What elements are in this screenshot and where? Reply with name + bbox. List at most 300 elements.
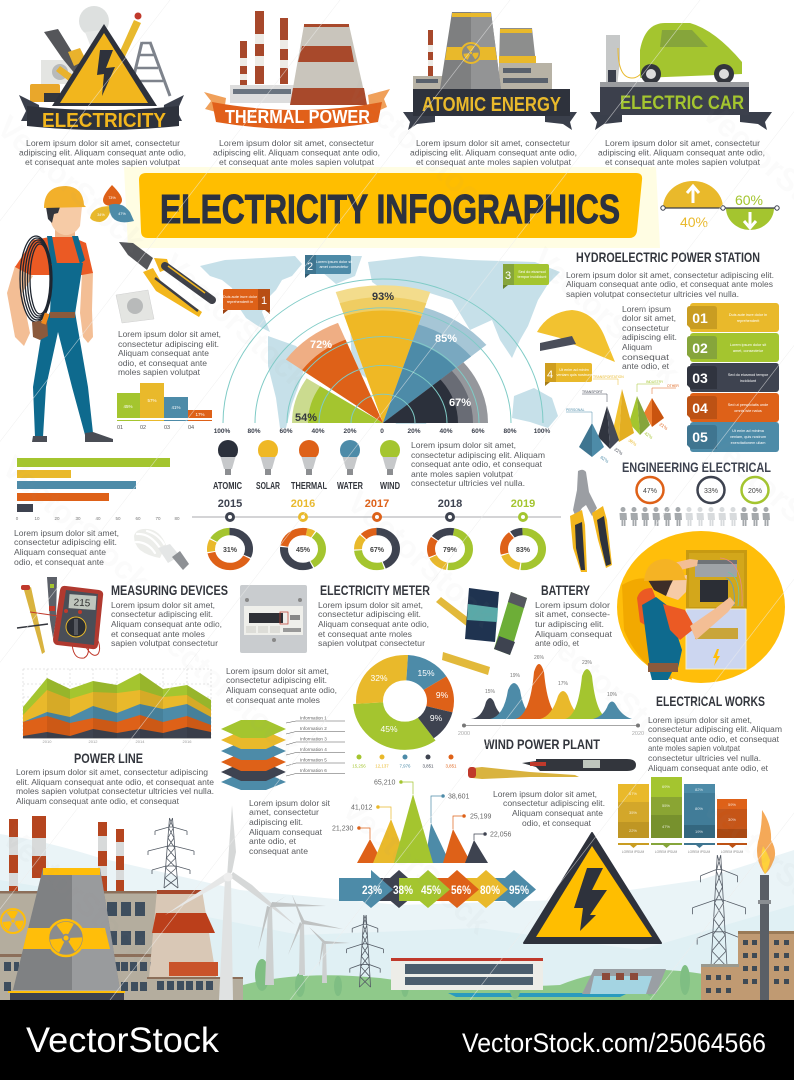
thermal tower [147,890,243,1000]
text block: electrical works: Lorem ipsum dolor sit amet, [648,715,752,725]
item 03 [687,363,779,392]
south america [268,336,308,428]
bell values: 19% [510,673,521,679]
caption: thermal power: adipiscing elit. Aliquam consequat ante odio, [213,148,380,158]
text block: turbine note: ante odio, et [249,836,297,846]
buildings [413,63,552,89]
item 04: Sed ut perspiciatis unde [728,403,768,407]
text block: wind plant: Aliquam consequat ante [512,808,603,818]
petal chart: 73% [108,196,116,200]
bulb labels: THERMAL [291,481,327,492]
callout flag 1: Duis aute irure dolor [223,295,258,299]
arrow 95% [486,870,536,908]
callout flag 1: 1 [261,295,267,307]
column ticks [618,843,747,848]
donut 2017: 67% [370,547,385,554]
text block: measuring: consectetur adipiscing elit. [111,609,213,619]
panel: electricity emblem [19,6,184,132]
bulb: water [340,440,360,475]
donut legend: 7,976 [400,764,411,768]
bulb labels: ATOMIC [213,481,242,492]
timeline years: 2015 [218,498,242,510]
text block: worker: Aliquam consequat ante [118,348,209,358]
title: ELECTRICITY INFOGRAPHICS [160,186,620,232]
text block: helmet note: Lorem ipsum [622,304,671,314]
column values [629,784,736,834]
australia [512,388,558,428]
bulb labels [213,481,400,492]
layer labels: Information 4 [300,747,327,752]
lower panel with bolt [686,609,746,669]
pyramid: orange [644,398,664,427]
donut 2015: 31% [223,547,238,554]
item 02: amet, consectetur [733,349,764,353]
item 05: 05 [692,429,708,445]
ring 20%: 20% [748,488,762,495]
bar chart: horizontal: 70 [155,516,161,521]
ribbon: electric car: ELECTRIC CAR [620,93,744,114]
text block: electrical works: consectetur adipiscing elit. Aliquam [648,724,782,734]
fuse cabinet [686,550,747,609]
icon: cfl bulb [134,529,189,570]
heading: wind power plant: WIND POWER PLANT [484,736,600,752]
text block: power line: Aliquam consequat ante odio, et consequat [16,796,180,806]
turbine: second [258,896,326,985]
pylon: right [693,855,745,967]
heading: electricity meter: ELECTRICITY METER [320,582,430,598]
caption: electricity [19,138,186,167]
timeline nodes [226,514,526,520]
petal chart: 47% [118,212,126,216]
caption: electric car: Lorem ipsum dolor sit amet, consectetur [605,138,760,148]
arrow values: 95% [509,883,529,897]
bulb: wind [380,440,400,475]
power station [391,958,543,990]
bar chart: horizontal: 50 [115,516,121,521]
bar chart: small columns: 02 [140,425,146,431]
item 02: 02 [692,340,708,356]
peak labels: 25,199 [470,814,492,820]
item 04: omnis iste natus [734,409,762,413]
area chart [23,669,211,744]
sector values: 85% [435,333,457,345]
chimneys: left [9,816,124,891]
pyramid labels: PERSONAL [566,408,585,412]
factory buildings [0,891,170,1000]
text block: wind plant [493,789,605,828]
text block: meter: sapien volutpat consectetur [318,638,425,648]
column values: 67% [629,791,637,796]
building [230,85,294,103]
text block: wind plant: consectetur adipiscing elit. [503,798,605,808]
bulb labels: WATER [337,481,364,492]
pylon: left [148,818,194,888]
icon: pencil [116,12,142,63]
donut legend: 3,851 [446,764,457,768]
axis labels: 2010 [43,739,52,744]
bell chart [458,655,644,737]
electrician scene [617,531,785,683]
text block: power line: Lorem ipsum dolor sit amet, consectetur adipiscing [16,767,208,777]
car [640,23,742,84]
pyramid labels: TRANSPORTATION [593,375,624,379]
item 04: 04 [692,400,708,416]
item 01: reprehenderit [737,319,760,323]
peaks [357,794,488,863]
bell values [485,655,618,698]
text block: meter: Aliquam consequat ante odio, [318,619,429,629]
ribbon: atomic energy [403,89,577,130]
column: green [651,777,682,838]
text block: power line [16,767,214,806]
turbine: third [288,895,343,975]
donut chart: large [352,666,457,768]
scale labels: 100% [534,428,551,435]
column labels: LOREM IPSUM [721,850,743,854]
text block: turbine note: adipiscing elit. [249,817,303,827]
charger [606,35,647,87]
pyramid chart [566,375,679,464]
pyramid labels [566,375,679,412]
text block: battery: ante odio, et [535,638,580,648]
text block: worker: Lorem ipsum dolor sit amet, [118,329,221,339]
scale labels [214,428,551,435]
ribbon: electricity [19,95,184,132]
arrow 38% [371,870,421,908]
chimney [428,30,433,76]
sector values: 54% [295,412,317,424]
layer: yellow [23,690,211,738]
overalls [33,236,93,437]
greenland [320,256,362,284]
text block: electrical works: consectetur ultricies vel nulla. [648,753,761,763]
bell values: 15% [485,689,496,695]
pyramid percentages [599,422,669,464]
text block: measuring: et consequat ante moles [111,629,205,639]
peak labels: 21,230 [332,826,354,832]
bar chart: horizontal: 80 [174,516,180,521]
text block: helmet note [622,304,677,371]
landscape [0,805,794,1000]
timeline years: 2016 [291,498,315,510]
ring gauges [636,477,768,503]
scale labels: 20% [343,428,357,435]
icon: pliers [44,29,88,85]
layer labels: Information 3 [300,736,327,742]
text block: chart note [411,440,545,488]
item 02 [687,333,779,362]
chimneys [240,11,288,86]
arrow values: 80% [480,883,500,897]
text block: measuring [111,600,222,648]
text block: electrical works: consequat ante odio, et consequat [648,734,780,744]
scale labels: 20% [407,428,421,435]
layered hexagon stack [221,716,345,790]
sector values [295,291,471,424]
callout flag 3: tempor incididunt [518,275,547,279]
bar chart: small columns: 57% [147,398,157,403]
text block: layers note [226,666,337,705]
text block: chart note: consectetur adipiscing elit. Aliquam [411,450,545,460]
text block: hydroelectric [566,270,774,299]
arms [7,266,93,346]
bar chart: small columns: 41% [171,405,181,410]
layer labels: Information 2 [300,726,327,731]
callout flag 4: 4 [547,369,553,381]
watermark text: VectorStock [145,613,307,764]
icon: warning triangle [52,24,157,106]
bar chart: small columns: 04 [188,425,194,431]
caption: atomic energy: Lorem ipsum dolor sit amet, consectetur [416,138,570,148]
scale labels: 40% [439,428,453,435]
arrow chain [339,870,536,908]
bell axis: 2020 [632,731,644,737]
layer: blue [23,704,211,738]
item 04 [687,393,779,422]
pyramid labels: INDUSTRY [646,380,664,384]
bell values: 17% [558,681,569,687]
heading: power line: POWER LINE [74,750,143,766]
heading: measuring devices: MEASURING DEVICES [111,582,228,598]
peak labels [332,780,512,840]
item 01: 01 [692,310,708,326]
text block: bar note [14,528,119,567]
ring 33%: 33% [704,488,718,495]
sector: wind 54% [292,378,383,423]
dam [582,969,666,994]
bar chart: horizontal: 60 [135,516,141,521]
text block: meter: Lorem ipsum dolor sit amet, [318,600,423,610]
donut 2018: 79% [443,547,458,554]
caption: electricity: et consequat ante moles sapien volutpat [25,157,181,167]
pyramid percentages: 42% [643,431,654,440]
warning sign [524,833,661,943]
worker illustration [7,186,113,442]
pyramid percentages: 22% [613,447,624,456]
callout flag 3: Sed do eiusmod [518,270,546,274]
layer leaders [286,721,345,776]
icon: toolbox [30,84,60,102]
layer: dark [23,727,211,738]
bar chart: horizontal: 10 [34,516,40,521]
column values: 69% [662,784,670,789]
text block: layers note: consectetur adipiscing elit. [226,675,327,685]
donut 2018 [431,532,469,566]
column values: 30% [728,817,736,822]
item 05: Ut enim ad minima [732,429,765,433]
caption: thermal power: et consequat ante moles sapien volutpat [219,157,375,167]
arrow values [362,883,529,897]
pyramid: yellow [613,389,634,442]
icon: multimeter and probes [17,577,103,658]
scale labels: 60% [471,428,485,435]
fold shading [47,673,211,738]
column labels: LOREM IPSUM [622,850,644,854]
second tower [499,28,536,64]
donut values: 32% [370,673,388,683]
axis labels [43,739,192,744]
turbine: large [165,805,295,1000]
watermark text: VectorStock [535,618,697,769]
text block: power line: moles sapien volutpat consectetur ultricies vel nulla. [16,786,214,796]
caption: electric car: adipiscing elit. Aliquam consequat ante odio, [598,148,765,158]
text block: chart note: consequat ante odio, et consequat [411,459,543,469]
column labels: LOREM IPSUM [688,850,710,854]
icon: large pliers [119,242,212,317]
text block: helmet note: Aliquam [622,342,652,352]
icon: voltage testers [468,759,636,779]
text block: layers note: et consequat ante moles [226,695,320,705]
text block: measuring: sapien volutpat consectetur [111,638,218,648]
pylon: middle [347,915,383,987]
text block: meter [318,600,429,648]
boots [32,432,113,442]
text block: battery: Aliquam consequat [535,629,613,639]
column: orange [717,799,747,838]
footer url: VectorStock.com/25064566 [462,1028,766,1058]
belt and pouch [32,312,75,340]
icon: combination pliers [570,470,612,572]
bulb legend [213,440,400,492]
title banner [124,167,660,248]
callout flag 2: 2 [307,261,313,273]
pyramid: dark [598,406,619,449]
donut legend: 15,256 [352,764,366,768]
timeline years: 2018 [438,498,462,510]
arrow 80% [457,870,508,908]
shirt [15,237,93,275]
eurasia [368,256,560,358]
scale labels: 100% [214,428,231,435]
callout flag 3: 3 [505,270,511,282]
arrow values: 56% [451,883,471,897]
text block: layers note: Aliquam consequat ante odio, [226,685,337,695]
scale labels: 0 [380,428,384,435]
bulb labels: WIND [380,481,400,492]
text block: meter: consectetur adipiscing elit. [318,609,421,619]
item 02: Lorem ipsum dolor sit [730,343,767,347]
text block: battery: sit amet, consecte- [535,609,610,619]
callout flag 1 [223,289,270,314]
callout flag 3 [503,264,549,289]
watermark text: VectorStock [335,790,497,941]
donut values: 9% [430,713,443,723]
scale labels: 80% [503,428,517,435]
text block: hydroelectric: sapien volutpat consectetur ultricies vel nulla. [566,289,739,299]
arrow 56% [428,870,479,908]
text block: bar note: odio, et consequat ante [14,557,104,567]
pyramid labels: TRANSPORT [582,390,603,394]
donut 2019: 83% [516,547,531,554]
watermark text: VectorStock [340,73,502,224]
donut values: 9% [436,690,449,700]
cable coil [20,236,52,322]
donut values: 15% [417,668,435,678]
arrow 45% [399,870,450,908]
axis labels: 2012 [89,739,98,744]
donut 2016 [284,532,322,566]
text block: chart note: consectetur ultricies vel nulla. [411,478,525,488]
bar chart: horizontal: 30 [75,516,81,521]
text block: turbine note: Aliquam consequat [249,827,323,837]
donut 2016: 45% [296,547,311,554]
layer labels [300,716,327,773]
radial percent chart [214,279,551,435]
item 03: 03 [692,370,708,386]
sector: water 85% [383,307,486,423]
text block: worker: odio, et consequat ante [118,358,207,368]
text block: worker: consectetur adipiscing elit. [118,339,219,349]
text block: wind plant: odio, et consequat [522,818,592,828]
column values: 82% [695,787,703,792]
donut 2017 [358,532,396,566]
bell values: 26% [534,655,545,661]
bar chart: small columns: 01 [117,425,123,431]
text block: helmet note: dolor sit amet, [622,313,676,323]
sector values: 72% [310,339,332,351]
flare stack [757,810,775,1000]
item 05 [687,422,779,452]
icon: ladder [129,42,170,96]
petal chart [90,185,134,222]
watermark text: VectorStock [155,246,317,397]
caption: thermal power: Lorem ipsum dolor sit amet, consectetur [219,138,374,148]
column: yellow [618,784,649,838]
icon: wall socket [41,60,77,84]
panel: electric car emblem [590,23,772,130]
peak labels: 22,056 [490,832,512,838]
text block: turbine note [249,798,331,856]
peak labels: 65,210 [374,780,396,786]
bar chart: horizontal: 0 [16,516,19,521]
caption: electric car [598,138,765,167]
donut 2015 [211,532,249,566]
nuclear cooling tower [8,868,125,1000]
text block: worker: moles sapien volutpat [118,367,201,377]
caption: electricity: Lorem ipsum dolor sit amet, consectetur [26,138,180,148]
people pictogram [620,507,770,526]
mountain chart [332,780,512,863]
layer labels: Information 5 [300,758,327,762]
callout flag 4: Ut enim ad minim [559,368,589,372]
scale labels: 40% [311,428,325,435]
text block: bar note: Aliquam consequat ante [14,547,106,557]
scale labels: 80% [247,428,261,435]
pyramid: blue [579,423,604,457]
text block: turbine note: amet, consectetur [249,807,319,817]
cooling tower [290,24,367,105]
bell values: 23% [582,660,593,666]
bulb: thermal [299,440,319,475]
text block: wind plant: Lorem ipsum dolor sit amet, [493,789,597,799]
text block: hydroelectric: Lorem ipsum dolor sit amet, consectetur adipiscing elit. [566,270,774,280]
arrow 23% [339,870,393,908]
bulb labels: SOLAR [256,481,281,492]
bell axis: 2000 [458,731,470,737]
text block: measuring: Aliquam consequat ante odio, [111,619,222,629]
ribbon: thermal power [204,89,390,129]
item 03: Sed do eiusmod tempor [728,373,769,377]
pyramid percentages: 21% [658,422,669,431]
peak labels: 38,601 [448,794,470,800]
bar chart: small columns: 17% [195,412,205,417]
axis labels: 2014 [136,739,145,744]
numbered list [687,303,779,452]
arrow values: 38% [393,883,413,897]
donut legend: 12,137 [375,764,389,768]
bulb: solar [258,440,278,475]
neck and head [44,186,86,240]
